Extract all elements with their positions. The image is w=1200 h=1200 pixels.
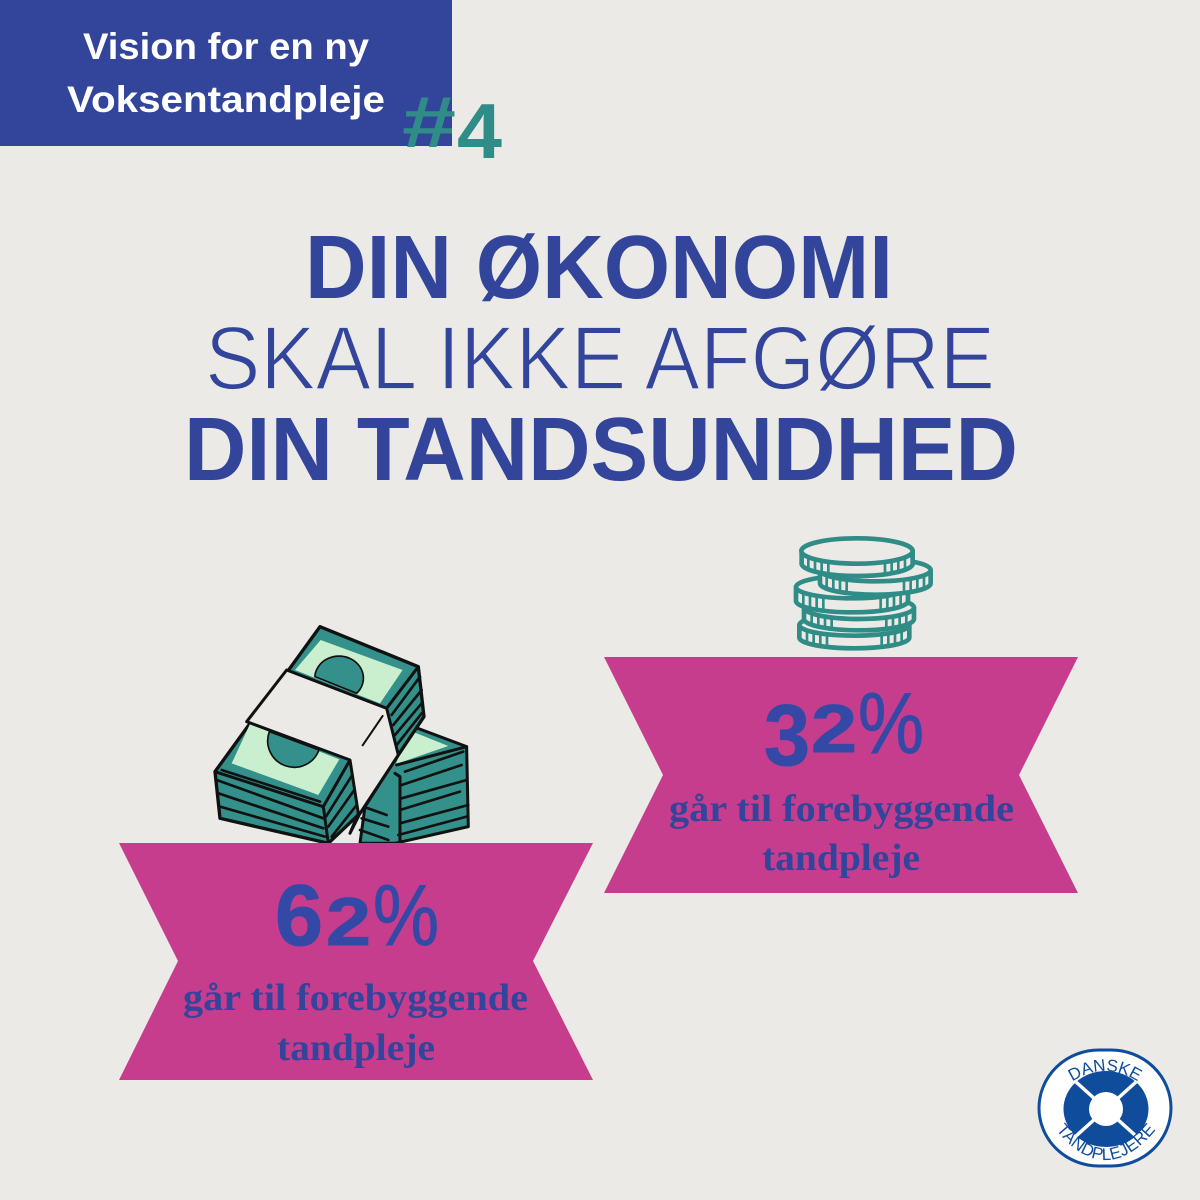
- rear bundle: [360, 727, 468, 843]
- bottom coin: [799, 614, 909, 648]
- top coin: [801, 538, 913, 576]
- fourth coin: [804, 596, 914, 630]
- ribbon: 32%: går til forebyggende: [669, 788, 1014, 830]
- ribbon: 32%: 2: [811, 691, 857, 767]
- second coin: [820, 559, 931, 595]
- ribbon: 62%: [119, 843, 593, 1080]
- logo: Danske Tandplejere: DANSKE: [1068, 1059, 1142, 1081]
- lower note: [232, 724, 339, 795]
- ribbon: 62%: går til forebyggende: [183, 977, 528, 1019]
- issue number: #: [402, 83, 456, 163]
- third coin: [796, 576, 908, 612]
- front bundle: [215, 627, 424, 843]
- upper note: [295, 640, 403, 703]
- title: [184, 218, 1018, 500]
- title: SKAL IKKE AFGØRE: [205, 309, 995, 409]
- icon: bundles of banknotes: [215, 627, 468, 843]
- ribbon: 62%: %: [373, 868, 439, 964]
- logo: Danske Tandplejere: TANDPLEJERE: [1058, 1122, 1156, 1160]
- header banner: Voksentandpleje: [67, 79, 385, 120]
- ribbon: 32%: 3: [764, 688, 810, 784]
- paper band: [247, 670, 398, 833]
- ribbon: 62%: tandpleje: [277, 1027, 435, 1069]
- icon: stack of coins: [796, 538, 931, 648]
- header banner: Vision for en ny: [83, 26, 369, 67]
- ribbon: 32%: [604, 657, 1078, 893]
- header banner: [0, 0, 452, 146]
- issue number: 4: [457, 87, 502, 175]
- ribbon: 62%: 2: [326, 884, 371, 960]
- title: DIN TANDSUNDHED: [184, 400, 1018, 500]
- title: DIN ØKONOMI: [305, 218, 893, 318]
- side edges: [215, 667, 418, 843]
- logo: Danske Tandplejere: [1038, 1048, 1172, 1168]
- ribbon: 32%: tandpleje: [762, 837, 920, 879]
- ribbon: 62%: 6: [275, 868, 323, 964]
- ribbon: 32%: %: [858, 676, 924, 772]
